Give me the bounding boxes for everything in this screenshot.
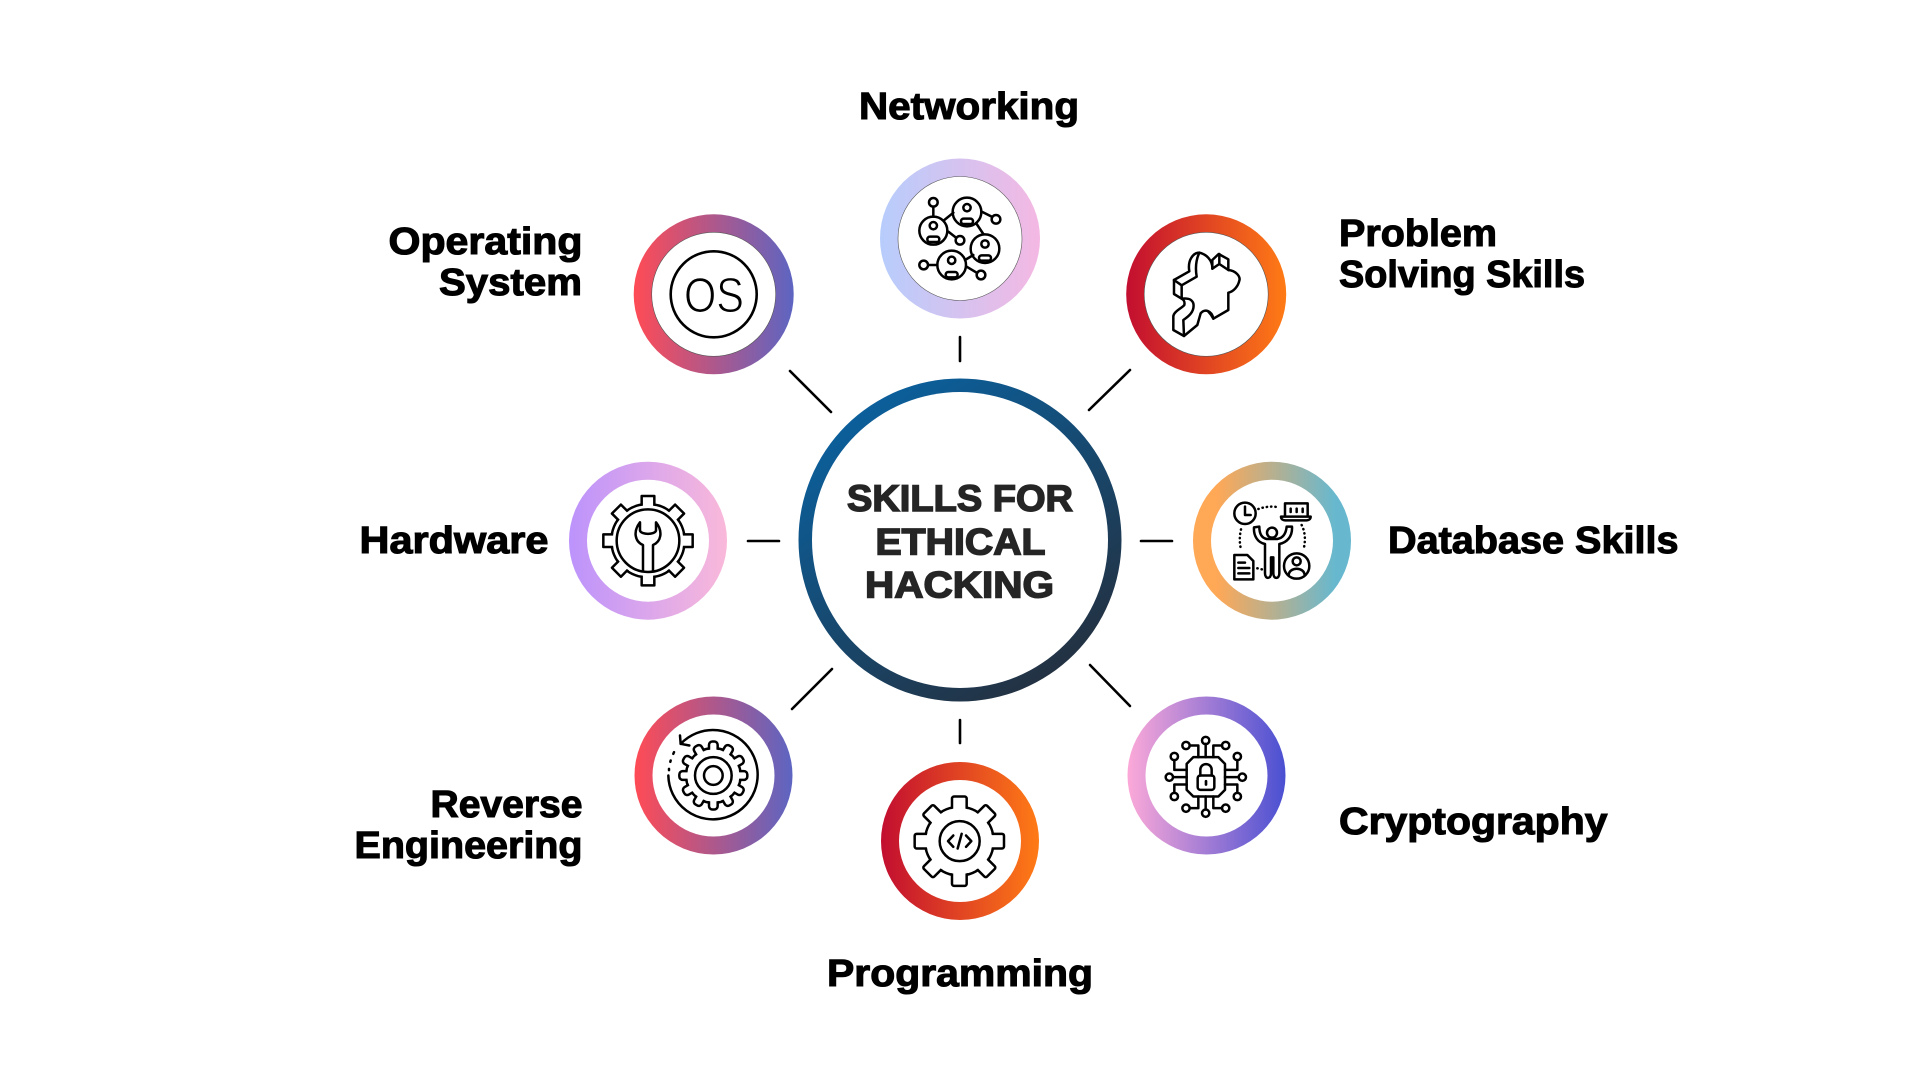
icon: network of people xyxy=(919,198,1000,279)
connector lines xyxy=(748,337,1172,743)
icon: gear with wrench xyxy=(603,496,693,585)
label: Networking: Networking xyxy=(859,86,1079,128)
label: Reverse Engineering xyxy=(354,784,582,867)
label: Cryptography: Cryptography xyxy=(1339,801,1608,843)
icon: OS badge xyxy=(671,251,757,337)
icon: gear with reverse arrow xyxy=(668,730,758,819)
node: Hardware xyxy=(569,462,727,620)
label: Operating System: Operating xyxy=(388,221,582,263)
node: Operating System xyxy=(634,214,794,374)
label: Hardware: Hardware xyxy=(360,520,548,562)
icon: gear with code symbol xyxy=(915,796,1004,886)
node: Networking xyxy=(880,158,1040,318)
title: HACKING xyxy=(865,564,1054,606)
label: Reverse Engineering: Engineering xyxy=(354,825,582,867)
label: Operating System xyxy=(388,221,582,304)
central circle with title xyxy=(798,378,1122,702)
label: Database Skills: Database Skills xyxy=(1388,520,1678,562)
icon: OS badge: OS xyxy=(684,269,744,323)
label: Problem Solving Skills: Solving Skills xyxy=(1339,254,1585,296)
node: Reverse Engineering xyxy=(634,696,792,854)
label: Problem Solving Skills: Problem xyxy=(1339,213,1497,255)
label: Problem Solving Skills xyxy=(1339,213,1585,296)
title: ETHICAL xyxy=(876,522,1046,562)
title: SKILLS FOR xyxy=(847,478,1073,519)
node: Cryptography xyxy=(1128,696,1286,854)
label: Operating System: System xyxy=(439,262,582,304)
node: Programming xyxy=(881,762,1039,920)
icon: puzzle piece xyxy=(1173,253,1240,336)
icon: chip with padlock xyxy=(1166,737,1246,817)
title xyxy=(847,478,1073,606)
node: Database Skills xyxy=(1193,462,1351,620)
label: Programming: Programming xyxy=(827,953,1093,995)
icon: person with database items xyxy=(1234,503,1311,579)
node: Problem Solving Skills xyxy=(1126,214,1286,374)
label: Reverse Engineering: Reverse xyxy=(430,784,582,826)
